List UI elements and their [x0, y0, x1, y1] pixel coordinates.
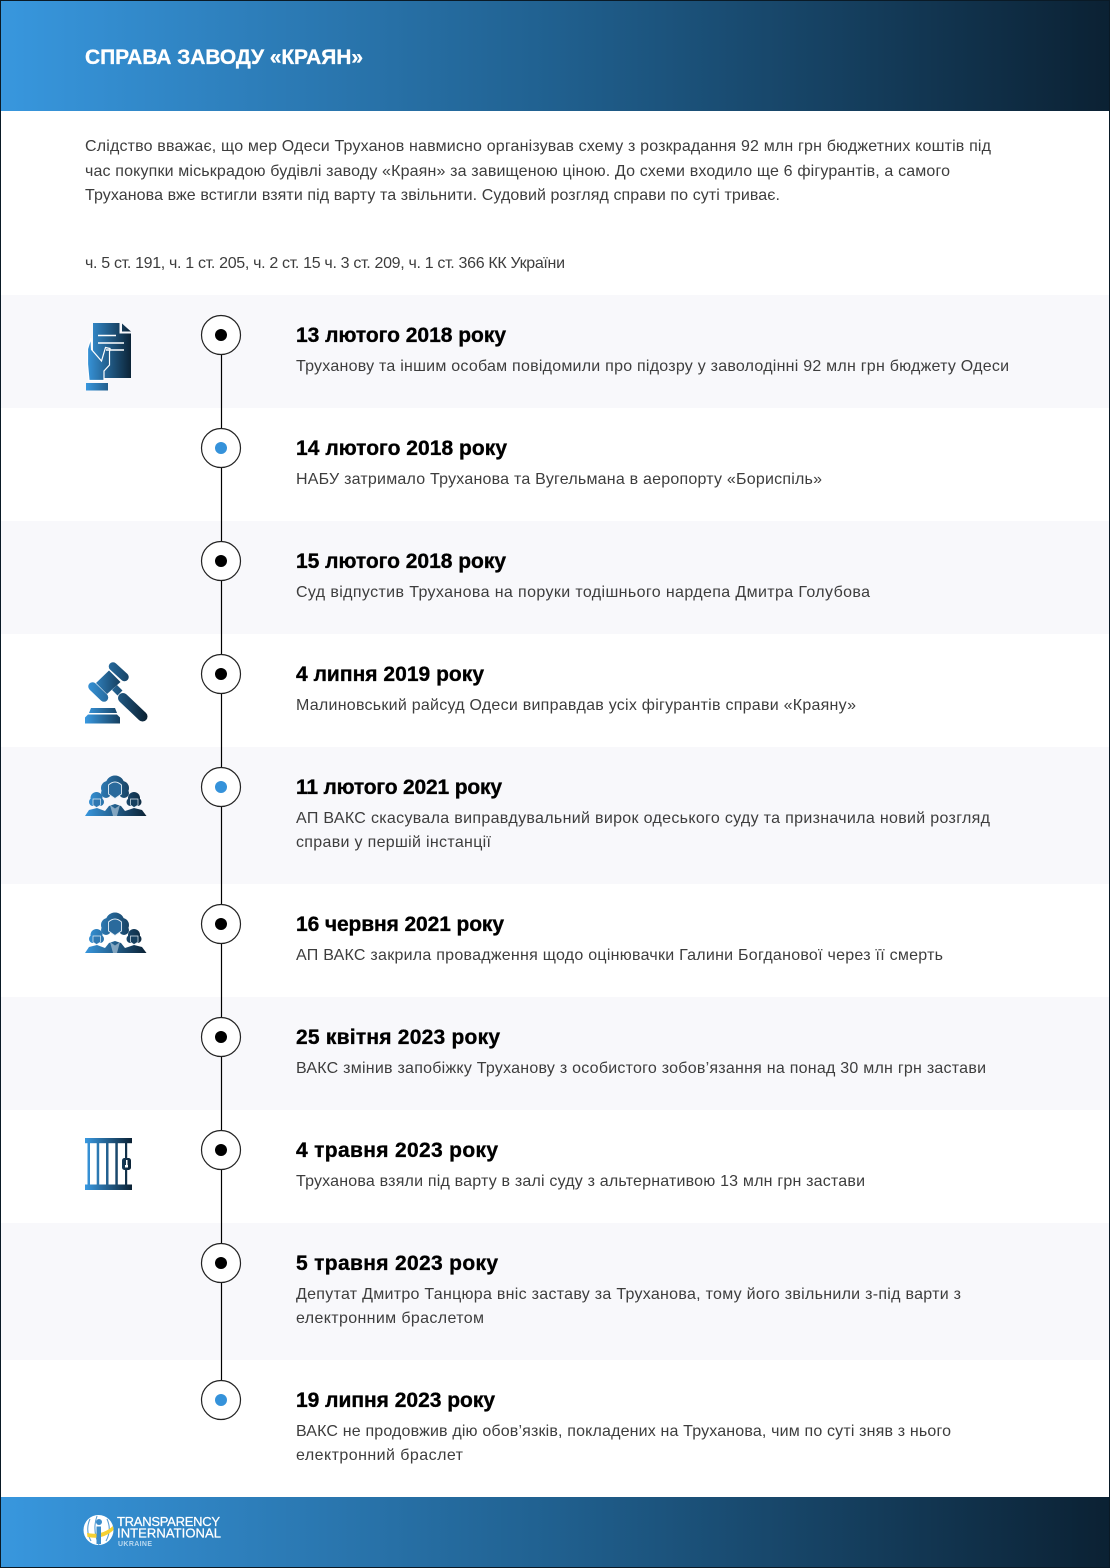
- event: 25 April 2023: [202, 1018, 986, 1077]
- intro paragraph: час покупки міськрадою будівлі заводу «Краян» за завищеною ціною. До схеми входило ще 6 фігурантів, а самого: [85, 163, 950, 180]
- event: 13 February 2018: [202, 316, 1009, 375]
- icon: panel of judges: [85, 776, 146, 816]
- event: 19 July 2023: [202, 1380, 951, 1464]
- icon: judge gavel: [85, 666, 142, 724]
- legal articles: ч. 5 ст. 191, ч. 1 ст. 205, ч. 2 ст. 15 ч. 3 ст. 209, ч. 1 ст. 366 КК України: [85, 255, 565, 272]
- footer band: [0, 1497, 1110, 1568]
- event: 16 June 2021: 16 червня 2021 року: [296, 913, 504, 936]
- event: 4 May 2023: Труханова взяли під варту в залі суду з альтернативою 13 млн грн застави: [296, 1173, 865, 1190]
- event: 15 February 2018: Суд відпустив Труханова на поруки тодішнього нардепа Дмитра Голубова: [296, 584, 870, 601]
- event: 15 February 2018: [202, 542, 870, 601]
- intro paragraph: Слідство вважає, що мер Одеси Труханов навмисно організував схему з розкрадання 92 млн грн бюджетних коштів під: [85, 138, 992, 155]
- title: СПРАВА ЗАВОДУ «КРАЯН»: [85, 46, 363, 69]
- event: 13 February 2018: Труханову та іншим особам повідомили про підозру у заволодінні 92 млн грн бюджету Одеси: [296, 358, 1009, 375]
- event: 4 May 2023: 4 травня 2023 року: [296, 1139, 498, 1162]
- event: 5 May 2023: електронним браслетом: [296, 1310, 484, 1327]
- event: 4 July 2019: Малиновський райсуд Одеси виправдав усіх фігурантів справи «Краяну»: [296, 697, 856, 714]
- event: 11 February 2021: 11 лютого 2021 року: [296, 776, 502, 799]
- event: 25 April 2023: ВАКС змінив запобіжку Труханову з особистого зобов’язання на понад 30 млн грн застави: [296, 1060, 986, 1077]
- event: 11 February 2021: [202, 768, 991, 851]
- event: 5 May 2023: Депутат Дмитро Танцюра вніс заставу за Труханова, тому його звільнили з-під варти з: [296, 1286, 961, 1303]
- event: 11 February 2021: АП ВАКС скасувала виправдувальний вирок одеського суду та призначила новий розгляд: [296, 810, 991, 827]
- event: 5 May 2023: 5 травня 2023 року: [296, 1252, 498, 1275]
- event: 19 July 2023: 19 липня 2023 року: [296, 1389, 495, 1412]
- header band: [0, 0, 1110, 111]
- icon: panel of judges second: [85, 912, 146, 953]
- event: 4 July 2019: [202, 654, 856, 714]
- icon: document in hand: [86, 323, 131, 390]
- logo: Transparency International Ukraine: TRANSPARENCY: [117, 1514, 220, 1529]
- event: 16 June 2021: АП ВАКС закрила провадження щодо оцінювачки Галини Богданової через її смерть: [296, 947, 943, 964]
- event: 19 July 2023: електронний браслет: [296, 1447, 464, 1464]
- event: 14 February 2018: 14 лютого 2018 року: [296, 437, 507, 460]
- event: 13 February 2018: 13 лютого 2018 року: [296, 324, 506, 347]
- event: 5 May 2023: [202, 1244, 961, 1327]
- logo: Transparency International Ukraine: [84, 1514, 221, 1548]
- event: 16 June 2021: [202, 904, 943, 964]
- icon: prison bars: [85, 1138, 132, 1190]
- event: 14 February 2018: НАБУ затримало Труханова та Вугельмана в аеропорту «Бориспіль»: [296, 471, 822, 488]
- event: 25 April 2023: 25 квітня 2023 року: [296, 1026, 500, 1049]
- event: 4 July 2019: 4 липня 2019 року: [296, 663, 484, 686]
- logo: Transparency International Ukraine: INTERNATIONAL: [117, 1526, 221, 1540]
- intro paragraph: [85, 138, 992, 204]
- intro paragraph: Труханова вже встигли взяти під варту та звільнити. Судовий розгляд справи по суті триває.: [85, 187, 780, 204]
- event: 4 May 2023: [202, 1130, 865, 1190]
- logo: Transparency International Ukraine: UKRAINE: [118, 1541, 152, 1548]
- event: 15 February 2018: 15 лютого 2018 року: [296, 550, 506, 573]
- event: 14 February 2018: [202, 428, 822, 488]
- event: 19 July 2023: ВАКС не продовжив дію обов’язків, покладених на Труханова, чим по суті зняв з нього: [296, 1423, 951, 1440]
- event: 11 February 2021: справи у першій інстанції: [296, 834, 492, 851]
- row backgrounds: [0, 295, 1110, 1360]
- timeline line: [220, 335, 222, 1400]
